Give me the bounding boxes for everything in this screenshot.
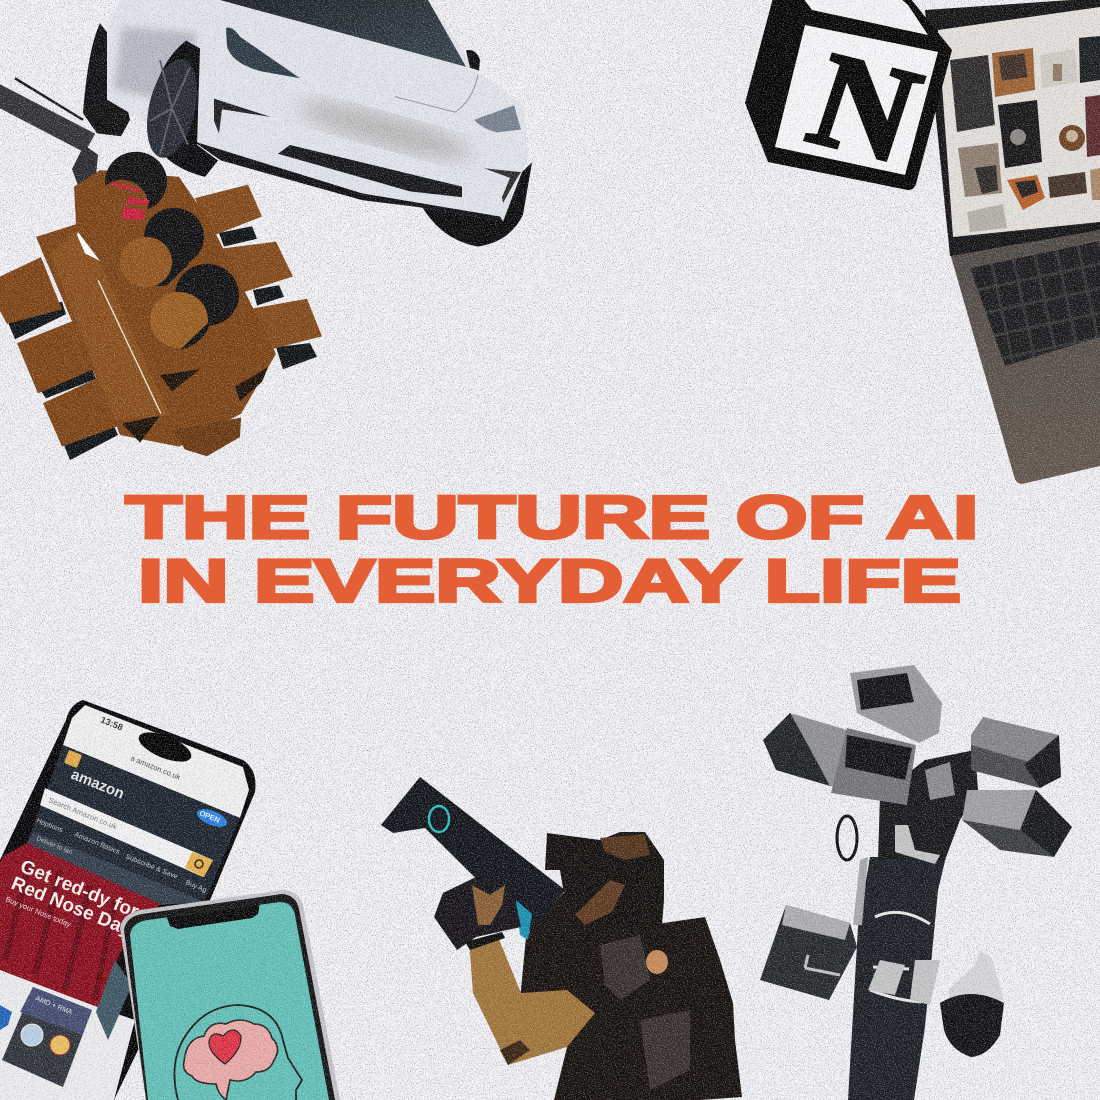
- open pill: [195, 806, 229, 830]
- middle lens tail: [152, 259, 190, 286]
- search button: [185, 852, 213, 877]
- laptop screen: [938, 7, 1100, 237]
- letter N: N: [794, 25, 935, 191]
- car right headlight: [474, 105, 521, 132]
- cube body: [745, 0, 952, 190]
- phone teal screen: [130, 902, 329, 1100]
- pole: [848, 857, 946, 1100]
- car left headlight: [226, 27, 300, 78]
- plate highlight: [77, 232, 100, 261]
- curtain folds: [5, 860, 115, 1000]
- image: CCTV pole with cameras: [760, 665, 1072, 1100]
- phone screen contents: Amazon Basics: [73, 831, 121, 856]
- top lens housing: [96, 180, 148, 230]
- blue accent: [516, 900, 532, 940]
- bottom lens visor: [175, 264, 239, 326]
- club badge left: [21, 1024, 43, 1046]
- shirt mottling: [600, 935, 690, 1090]
- bracket plates: [868, 825, 940, 1005]
- club badge right: [50, 1035, 70, 1055]
- top camera lens: [857, 673, 914, 710]
- right camera front: [1024, 735, 1061, 788]
- backpack and torso: [520, 893, 742, 1100]
- phone screen contents: Get red-dy for: [17, 856, 142, 923]
- lower right camera body: [962, 790, 1054, 857]
- phone screen contents: Deliver to Ian: [35, 835, 74, 856]
- pole side sheen: [853, 857, 868, 925]
- centre strip shading: [50, 232, 170, 420]
- bottom lens shadow: [180, 319, 212, 350]
- image: white electric car: [83, 0, 532, 247]
- dark louvers: [7, 226, 317, 460]
- image: laptop: [925, 0, 1100, 484]
- white bands: [870, 912, 930, 1002]
- fingers: [472, 885, 505, 925]
- middle lens housing: [120, 237, 172, 287]
- orange blotch: [646, 950, 668, 974]
- car right vent: [484, 168, 521, 203]
- head with headset: [545, 832, 664, 935]
- image: phone with brain and heart: [120, 890, 340, 1100]
- wrist strap: [465, 932, 505, 950]
- car rear tyre: [83, 23, 130, 136]
- dome camera: [940, 994, 1004, 1057]
- app icon: [64, 750, 82, 768]
- lower right camera front: [1020, 790, 1072, 857]
- phone screen contents: Hoptions: [35, 817, 64, 834]
- center camera lens: [845, 735, 912, 780]
- lower left camera top: [782, 905, 850, 940]
- title line two: IN EVERYDAY LIFE: [138, 548, 961, 614]
- image: Notion cube logo: [745, 0, 952, 191]
- car fog trim: [214, 99, 271, 133]
- seam highlight: [98, 280, 161, 414]
- phone frame: [124, 894, 335, 1100]
- amazon header: [27, 745, 240, 905]
- phone screen contents: a amazon.co.uk: [129, 754, 182, 782]
- laptop base: [950, 225, 1100, 484]
- phone labels: 13:58: [99, 715, 124, 732]
- car mirror: [466, 50, 480, 71]
- arm shadow: [500, 1040, 530, 1065]
- car grille: [278, 145, 462, 197]
- title line one: THE FUTURE OF AI: [126, 484, 978, 551]
- lower white section: [0, 970, 135, 1100]
- cube front face: [775, 25, 938, 175]
- junction metal: [925, 762, 955, 800]
- lower left camera: [760, 905, 857, 1000]
- head outline: [174, 1005, 302, 1100]
- title: [126, 484, 978, 614]
- phone screen contents: AMD + RMA: [34, 995, 73, 1017]
- neck skin: [575, 880, 625, 925]
- image: person with VR headset and controller: [381, 777, 742, 1100]
- right camera shade: [971, 745, 1040, 788]
- phone screen contents: Red Nose Day: [8, 873, 135, 941]
- phone frame edge: [120, 890, 340, 1100]
- lower right camera shadow: [962, 820, 1054, 857]
- cable loop: [837, 816, 857, 860]
- bottom shadows: [122, 367, 268, 443]
- top lens visor: [105, 152, 167, 212]
- hair patch: [600, 834, 650, 860]
- blue product: [0, 1005, 12, 1030]
- traffic pole wire: [15, 78, 83, 120]
- bottom lens housing: [150, 292, 208, 348]
- car front right tyre: [420, 162, 532, 247]
- phone screen contents: amazon: [69, 766, 127, 803]
- delivery bar: [27, 832, 205, 905]
- top camera body: [850, 665, 942, 743]
- middle lens visor: [144, 208, 204, 266]
- red banner: [0, 843, 160, 1008]
- car body: [107, 0, 528, 221]
- car hood line: [395, 75, 478, 112]
- car lower lip: [193, 141, 503, 221]
- phone screen contents: Buy Ag: [184, 879, 208, 894]
- phone screen contents: Buy your Nose today: [4, 895, 72, 929]
- junction cables: [878, 750, 978, 860]
- forearm and upper arm: [469, 937, 595, 1065]
- side card: [96, 960, 132, 1040]
- car front wheel rim: [139, 54, 205, 162]
- match card: [2, 987, 92, 1087]
- car wheel spokes: [150, 60, 190, 155]
- search bar: [40, 788, 213, 877]
- phone screen contents: Search Amazon.co.uk: [47, 796, 118, 831]
- image: traffic light with pole: [0, 78, 322, 460]
- car windshield: [220, 0, 466, 67]
- right fins: [195, 185, 322, 350]
- left camera front: [763, 713, 830, 786]
- heart: [209, 1030, 241, 1064]
- bottom bracket bits: [172, 418, 241, 456]
- dome mount: [948, 950, 1004, 1005]
- phone frame: [0, 700, 256, 1100]
- traffic bracket: [72, 145, 98, 186]
- status bar: [63, 705, 249, 818]
- card sky: [20, 987, 92, 1035]
- left camera body: [776, 713, 847, 787]
- image: phone with Amazon page: [0, 700, 256, 1100]
- left fins: [0, 257, 120, 447]
- lower left camera mark: [805, 955, 840, 975]
- search icon: [195, 860, 203, 868]
- main housing: [36, 170, 276, 447]
- screen tiles: [950, 36, 1100, 232]
- laptop keyboard: [970, 241, 1100, 366]
- phone notch: [167, 904, 260, 929]
- car front wheel tyre: [149, 41, 218, 177]
- hand glove: [434, 877, 521, 950]
- car hood shading: [294, 92, 476, 169]
- camera pill: [135, 726, 195, 768]
- red lit lamp: [112, 182, 150, 220]
- right camera body: [971, 717, 1059, 788]
- brain: [184, 1020, 278, 1100]
- laptop lid bezel: [925, 0, 1100, 256]
- open pill label: OPEN: [198, 809, 221, 825]
- phone screen contents: Subscribe & Save: [124, 853, 179, 881]
- controller ring: [429, 806, 449, 832]
- cube top face: [803, 0, 928, 35]
- gun controller: [381, 777, 565, 933]
- car side panel shading: [114, 27, 198, 102]
- center camera body: [831, 728, 916, 805]
- traffic pole: [0, 94, 90, 143]
- phone screen contents: [0, 705, 249, 1100]
